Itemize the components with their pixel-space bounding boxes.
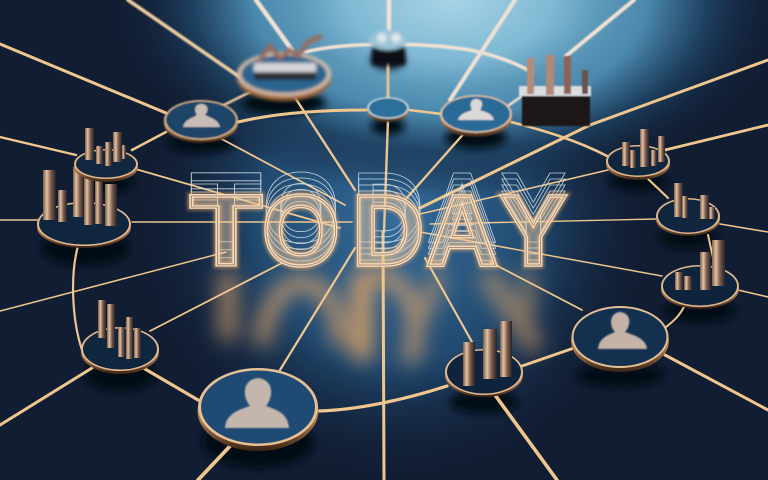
node: person right: [571, 306, 669, 372]
letter reflections: [228, 270, 535, 362]
shadows under nodes: [41, 51, 736, 468]
back wire layers: ODAY: [262, 164, 567, 276]
tube core: ODAY: [262, 175, 567, 287]
back wire layers: ODAY: [262, 152, 567, 264]
network lines: rings: [73, 110, 714, 411]
node: person upper centre: [440, 95, 512, 137]
bars: [43, 167, 117, 226]
word: TODAY: [190, 152, 567, 287]
back wire layers: ODAY: [262, 170, 567, 282]
back wire layers: T: [190, 168, 262, 280]
node: top-right block chart: [519, 55, 591, 126]
bars: [85, 128, 126, 166]
node: large person: [198, 368, 318, 451]
chart node: lower left: [81, 300, 159, 374]
back wire layers: [190, 152, 567, 282]
icon: person: [598, 312, 647, 349]
node: top-left chart: [237, 36, 331, 101]
back wire layers: T: [190, 152, 262, 264]
chart node: left small: [74, 128, 138, 182]
chart node: right middle: [656, 183, 720, 236]
back wire layers: ODAY: [262, 158, 567, 270]
bars: [622, 129, 665, 168]
chart node: right lower: [661, 240, 739, 309]
icon: person: [225, 378, 289, 428]
bars: [675, 240, 725, 290]
tube: ODAY: [262, 175, 567, 287]
back wire layers: T: [190, 160, 262, 272]
bars: [98, 300, 141, 359]
tube core: T: [190, 175, 262, 287]
chart node: left large: [37, 167, 131, 248]
node: person upper left: [164, 100, 238, 143]
chart node: right upper: [606, 129, 670, 180]
icon: person: [458, 99, 494, 120]
node: top blurred disc: [369, 30, 407, 65]
icon: person: [183, 104, 220, 127]
glow: ODAY: [262, 175, 567, 287]
bars: [463, 321, 512, 386]
node: centre small disc: [367, 97, 409, 122]
bars: [674, 183, 715, 219]
chart node: bottom centre: [445, 321, 523, 397]
glow: T: [190, 175, 262, 287]
top blurred lines: [128, 0, 634, 108]
tube: T: [190, 175, 262, 287]
